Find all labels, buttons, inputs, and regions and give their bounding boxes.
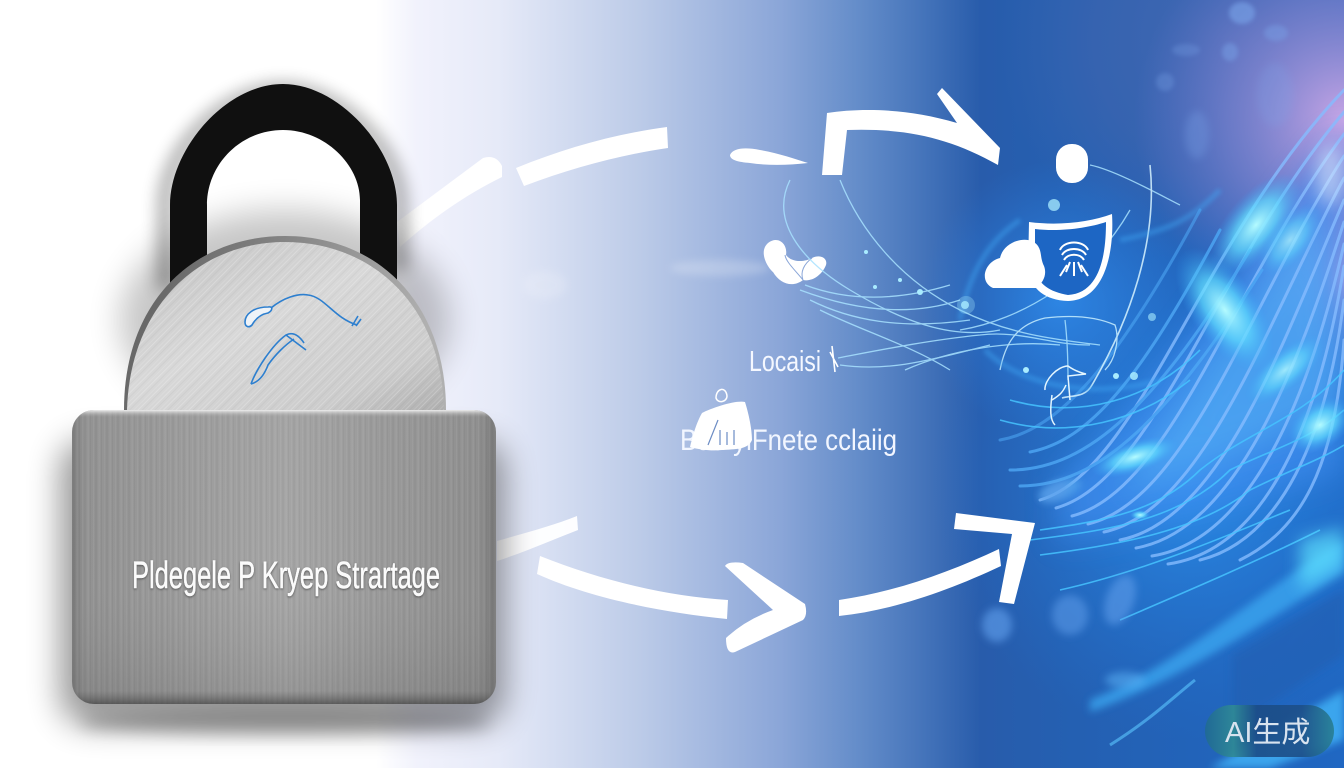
icon: lower bag outline (1045, 366, 1086, 425)
icon: person figure (690, 389, 752, 450)
faint light streak behind the centre (523, 260, 770, 299)
mark beside Locaisi (830, 346, 838, 372)
blue bokeh near arrow (982, 478, 1142, 642)
panel: glowing data streams (920, 0, 1344, 768)
icon: cloud (985, 240, 1045, 288)
fibre lines (784, 165, 1180, 398)
shackle (170, 84, 397, 300)
padlock (72, 84, 496, 704)
badge: AI generated: AI生成 (1225, 716, 1310, 749)
body label: Pldegele P Kryep Strartage (132, 555, 440, 597)
bright cyan clusters (1036, 145, 1344, 520)
person head (1056, 144, 1088, 183)
icon: shield (1028, 214, 1112, 301)
icon: blob outline (764, 240, 826, 284)
label: Locaisi: Locaisi (749, 346, 821, 378)
arrow: bottom right curved (839, 513, 1035, 616)
icon: brush swoosh (730, 148, 808, 165)
diagonal bright band (1060, 130, 1344, 540)
badge: AI generated (1205, 705, 1334, 757)
padlock drop shadow (60, 90, 505, 734)
label: lower caption: Buu yiFnete cclaiig (680, 424, 897, 457)
arrow: top right curved (822, 88, 1000, 175)
bokeh spots (1156, 2, 1293, 159)
arrow: upper left dashes (397, 127, 668, 247)
arrow: bottom left curved (497, 516, 806, 652)
icon: blue key sketch (245, 295, 361, 384)
streak band (1000, 90, 1344, 564)
dome (124, 236, 446, 410)
lock body (72, 410, 496, 704)
lower bright stripes (1090, 528, 1344, 768)
